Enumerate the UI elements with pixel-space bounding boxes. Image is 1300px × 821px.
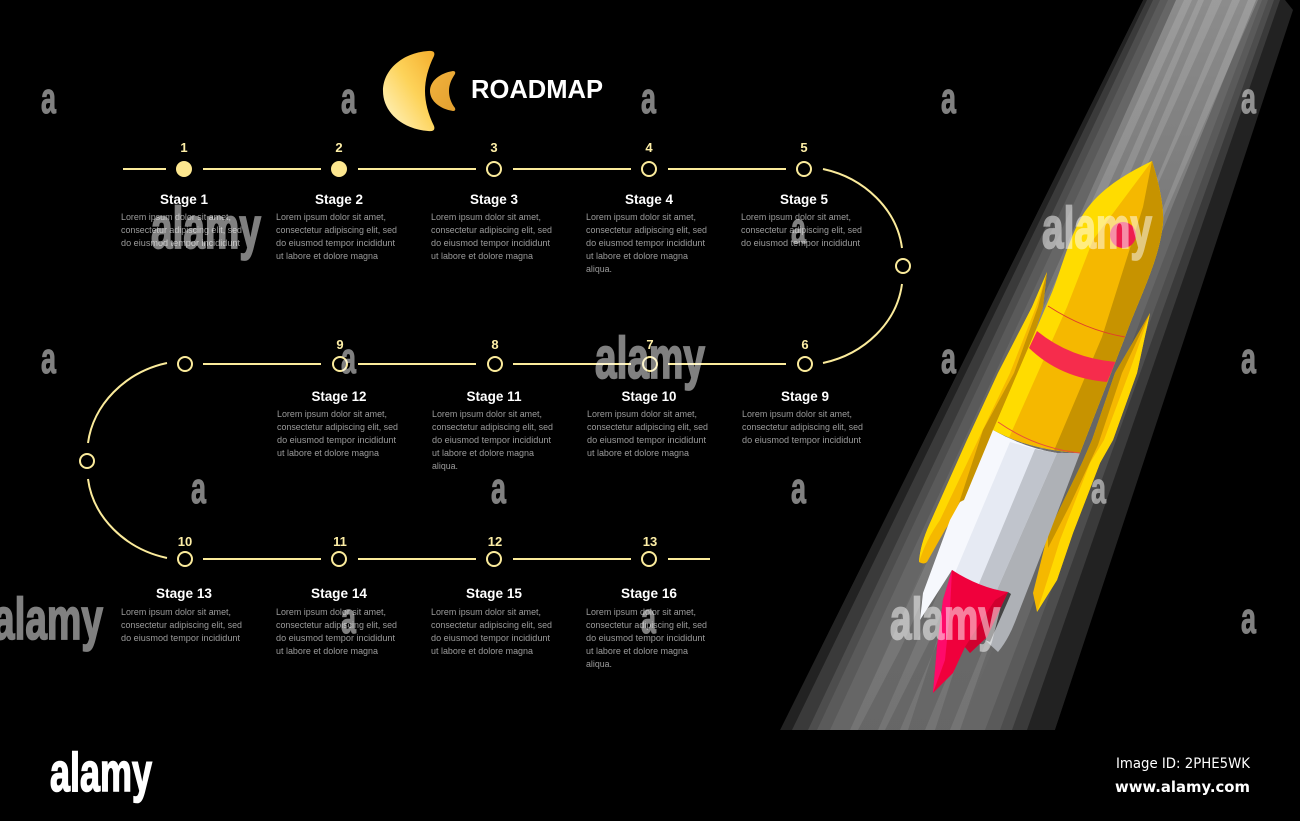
- stage 14: [276, 585, 397, 657]
- stage 2: ut labore et dolore magna: [276, 251, 379, 262]
- stage 11: ut labore et dolore magna: [432, 448, 535, 459]
- stage 1: do eiusmod tempor incididunt: [121, 238, 240, 249]
- stage 14: Stage 14: [311, 585, 367, 601]
- stage 15: Stage 15: [466, 585, 522, 601]
- node numbers: 6: [801, 337, 809, 352]
- watermark overlay: a: [491, 464, 506, 513]
- watermark overlay: a: [941, 74, 956, 123]
- watermark overlay: a: [791, 204, 806, 253]
- left booster: [919, 272, 1047, 564]
- right booster: [1033, 313, 1150, 612]
- stage 4: [586, 191, 707, 275]
- watermark overlay: [0, 74, 1256, 652]
- watermark overlay: a: [1241, 594, 1256, 643]
- stage 16: Stage 16: [621, 585, 677, 601]
- stage 3: consectetur adipiscing elit, sed: [431, 225, 552, 236]
- watermark overlay: alamy: [595, 326, 705, 391]
- stage 16: aliqua.: [586, 659, 612, 670]
- yellow upper body: [993, 161, 1164, 453]
- stage 2: Lorem ipsum dolor sit amet,: [276, 212, 386, 223]
- footer image id: Image ID: 2PHE5WK: [1116, 756, 1251, 772]
- stage 15: do eiusmod tempor incididunt: [431, 633, 550, 644]
- stage 11: aliqua.: [432, 461, 458, 472]
- stage 2: consectetur adipiscing elit, sed: [276, 225, 397, 236]
- stage 15: [431, 585, 552, 657]
- watermark overlay: a: [341, 334, 356, 383]
- stage 16: [586, 585, 707, 670]
- stage 4: do eiusmod tempor incididunt: [586, 238, 705, 249]
- stage 3: ut labore et dolore magna: [431, 251, 534, 262]
- stage 13: [121, 585, 242, 644]
- stage 12: ut labore et dolore magna: [277, 448, 380, 459]
- red band: [1029, 331, 1116, 382]
- stage 11: [432, 388, 553, 472]
- flame gap shadow: [985, 592, 1011, 642]
- stage 16: do eiusmod tempor incididunt: [586, 633, 705, 644]
- watermark overlay: a: [191, 464, 206, 513]
- stage 3: Stage 3: [470, 191, 518, 207]
- timeline path: [88, 169, 902, 559]
- watermark overlay: a: [1241, 74, 1256, 123]
- stage 10: [587, 388, 708, 459]
- node numbers: 3: [490, 140, 498, 155]
- stage 5: [741, 191, 862, 249]
- stage 5: consectetur adipiscing elit, sed: [741, 225, 862, 236]
- stage 14: do eiusmod tempor incididunt: [276, 633, 395, 644]
- watermark overlay: a: [1091, 464, 1106, 513]
- stage 10: ut labore et dolore magna: [587, 448, 690, 459]
- watermark overlay: a: [41, 74, 56, 123]
- stage 1: Lorem ipsum dolor sit amet,: [121, 212, 231, 223]
- watermark overlay: a: [941, 334, 956, 383]
- stage 13: Stage 13: [156, 585, 212, 601]
- node numbers: [178, 140, 809, 549]
- stage 4: ut labore et dolore magna: [586, 251, 689, 262]
- body seam between yellow and white: [998, 422, 1080, 453]
- stage 13: consectetur adipiscing elit, sed: [121, 620, 242, 631]
- stage 13: Lorem ipsum dolor sit amet,: [121, 607, 231, 618]
- stage 1: [121, 191, 242, 249]
- stage 15: Lorem ipsum dolor sit amet,: [431, 607, 541, 618]
- stage 10: Stage 10: [622, 388, 677, 404]
- stage 14: ut labore et dolore magna: [276, 646, 379, 657]
- stage 13: do eiusmod tempor incididunt: [121, 633, 240, 644]
- stage 14: consectetur adipiscing elit, sed: [276, 620, 397, 631]
- stage 4: Lorem ipsum dolor sit amet,: [586, 212, 696, 223]
- stage 9: do eiusmod tempor incididunt: [742, 435, 861, 446]
- stage 3: do eiusmod tempor incididunt: [431, 238, 550, 249]
- stage 12: Lorem ipsum dolor sit amet,: [277, 409, 387, 420]
- stage 12: [277, 388, 398, 459]
- stage 4: aliqua.: [586, 264, 612, 275]
- stage 9: [742, 388, 863, 446]
- node numbers: 7: [646, 337, 654, 352]
- stage 14: Lorem ipsum dolor sit amet,: [276, 607, 386, 618]
- watermark overlay: a: [41, 334, 56, 383]
- speed trail band behind the rocket: [780, 0, 1300, 730]
- node numbers: 2: [335, 140, 343, 155]
- stage 15: consectetur adipiscing elit, sed: [431, 620, 552, 631]
- stage 3: [431, 191, 552, 262]
- stage 5: do eiusmod tempor incididunt: [741, 238, 860, 249]
- watermark overlay: a: [641, 74, 656, 123]
- stage 12: Stage 12: [312, 388, 367, 404]
- stage 4: Stage 4: [625, 191, 673, 207]
- stage 16: consectetur adipiscing elit, sed: [586, 620, 707, 631]
- node numbers: 5: [800, 140, 808, 155]
- node numbers: 10: [178, 534, 192, 549]
- watermark overlay: a: [641, 594, 656, 643]
- footer url: www.alamy.com: [1115, 778, 1250, 796]
- stage 3: Lorem ipsum dolor sit amet,: [431, 212, 541, 223]
- stage 11: do eiusmod tempor incididunt: [432, 435, 551, 446]
- stage 12: do eiusmod tempor incididunt: [277, 435, 396, 446]
- stage 12: consectetur adipiscing elit, sed: [277, 422, 398, 433]
- stage 4: consectetur adipiscing elit, sed: [586, 225, 707, 236]
- node numbers: 4: [645, 140, 653, 155]
- watermark overlay: alamy: [1042, 196, 1152, 261]
- stage 16: Lorem ipsum dolor sit amet,: [586, 607, 696, 618]
- watermark overlay: alamy: [151, 196, 261, 261]
- flames: [933, 570, 1008, 693]
- logo icon: [383, 51, 455, 131]
- node numbers: 11: [333, 534, 347, 549]
- stage 11: consectetur adipiscing elit, sed: [432, 422, 553, 433]
- footer logo: alamy: [50, 741, 152, 803]
- watermark overlay: alamy: [890, 587, 1000, 652]
- watermark overlay: a: [341, 74, 356, 123]
- watermark overlay: a: [341, 594, 356, 643]
- node numbers: 12: [488, 534, 502, 549]
- porthole: [1110, 222, 1136, 248]
- stage 1: Stage 1: [160, 191, 208, 207]
- stage 5: Lorem ipsum dolor sit amet,: [741, 212, 851, 223]
- grey tail shadow: [985, 453, 1080, 652]
- stage 2: [276, 191, 397, 262]
- node numbers: 1: [180, 140, 188, 155]
- node numbers: 13: [643, 534, 657, 549]
- stage 16: ut labore et dolore magna: [586, 646, 689, 657]
- stage 15: ut labore et dolore magna: [431, 646, 534, 657]
- watermark overlay: a: [791, 464, 806, 513]
- stage 10: Lorem ipsum dolor sit amet,: [587, 409, 697, 420]
- stage 5: Stage 5: [780, 191, 828, 207]
- stage 9: Stage 9: [781, 388, 829, 404]
- timeline nodes: [80, 162, 910, 566]
- watermark overlay: a: [1241, 334, 1256, 383]
- rocket: [919, 150, 1180, 693]
- stage 11: Stage 11: [466, 388, 522, 404]
- stage 11: Lorem ipsum dolor sit amet,: [432, 409, 542, 420]
- stage 2: Stage 2: [315, 191, 363, 207]
- stage 9: consectetur adipiscing elit, sed: [742, 422, 863, 433]
- stage 2: do eiusmod tempor incididunt: [276, 238, 395, 249]
- node numbers: 9: [336, 337, 344, 352]
- stage 9: Lorem ipsum dolor sit amet,: [742, 409, 852, 420]
- title: ROADMAP: [471, 74, 603, 104]
- stage 1: consectetur adipiscing elit, sed: [121, 225, 242, 236]
- seam line: [1048, 306, 1125, 337]
- node numbers: 8: [491, 337, 499, 352]
- stage 10: consectetur adipiscing elit, sed: [587, 422, 708, 433]
- white lower body: [920, 430, 1057, 620]
- stage 10: do eiusmod tempor incididunt: [587, 435, 706, 446]
